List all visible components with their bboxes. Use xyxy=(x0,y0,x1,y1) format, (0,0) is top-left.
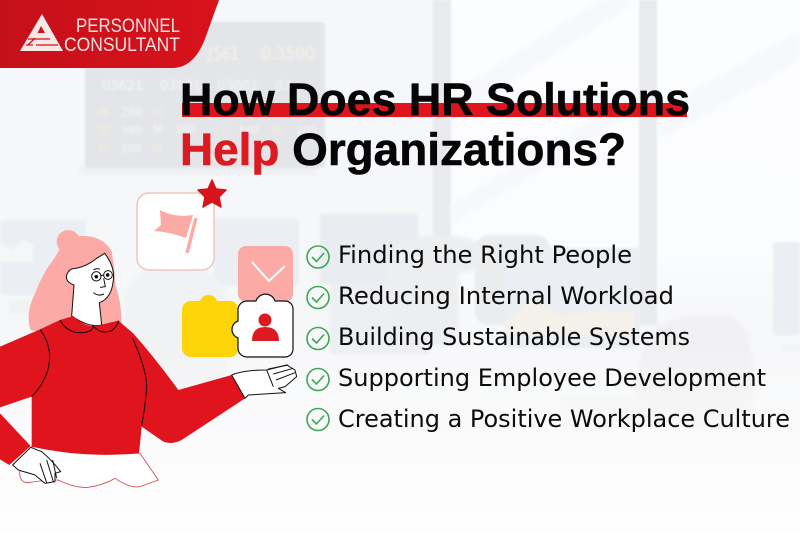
logo text: PERSONNEL xyxy=(76,16,180,37)
background big monitor xyxy=(80,22,325,175)
hair xyxy=(29,230,122,337)
item 2: Reducing Internal Workload xyxy=(338,282,674,310)
background big monitor: 200 xyxy=(121,142,142,155)
face and neck xyxy=(66,253,114,326)
item 3: Building Sustainable Systems xyxy=(338,323,690,351)
logo text xyxy=(64,16,180,56)
logo text: CONSULTANT xyxy=(64,35,180,56)
illustration: woman in red sweater xyxy=(0,230,297,487)
background big monitor: M xyxy=(153,123,162,136)
background big monitor: 200 xyxy=(175,123,196,136)
logo mark xyxy=(20,14,63,51)
title line 2: Help Organizations? xyxy=(180,124,626,175)
background big monitor: W xyxy=(272,124,283,137)
checklist xyxy=(307,241,790,433)
icon: flag card with star xyxy=(137,180,226,270)
title underline highlight xyxy=(182,103,687,117)
background big monitor: M xyxy=(153,106,162,119)
title xyxy=(180,74,690,175)
background big monitor: 280 xyxy=(121,106,142,119)
icon: yellow puzzle piece xyxy=(182,295,238,357)
left hand xyxy=(13,447,61,483)
icon: white puzzle piece with person xyxy=(232,294,293,357)
background big monitor: 03001 xyxy=(217,79,258,94)
sweater seam lines and collar xyxy=(32,320,147,426)
background big monitor: 03621 xyxy=(102,79,143,94)
title line 1: How Does HR Solutions xyxy=(180,74,690,125)
background big monitor: BC xyxy=(99,124,114,137)
right hand xyxy=(232,365,297,398)
background big monitor: 200 xyxy=(296,124,317,137)
background big monitor: M xyxy=(99,106,108,119)
item 4: Supporting Employee Development xyxy=(338,364,766,392)
glasses and facial features xyxy=(92,269,112,295)
icon: pink chevron tile xyxy=(238,246,293,302)
background big monitor: M xyxy=(153,142,162,155)
background big monitor: LC xyxy=(215,124,229,137)
item 1: Finding the Right People xyxy=(338,241,632,269)
logo banner xyxy=(0,0,219,68)
background big monitor: M xyxy=(99,142,108,155)
lower left arm xyxy=(0,413,31,465)
background big monitor: 140 xyxy=(238,124,259,137)
background big monitor: 3561 xyxy=(205,44,239,65)
background big monitor: 0.3500 xyxy=(261,44,315,64)
background big monitor: 03621 xyxy=(160,79,201,94)
background big monitor: 380 xyxy=(121,124,142,137)
background monitors and chairs xyxy=(0,214,800,354)
item 5: Creating a Positive Workplace Culture xyxy=(338,405,790,433)
skirt and shirt tail xyxy=(20,447,158,487)
background big monitor: 03 xyxy=(275,79,292,94)
sweater xyxy=(0,316,245,455)
